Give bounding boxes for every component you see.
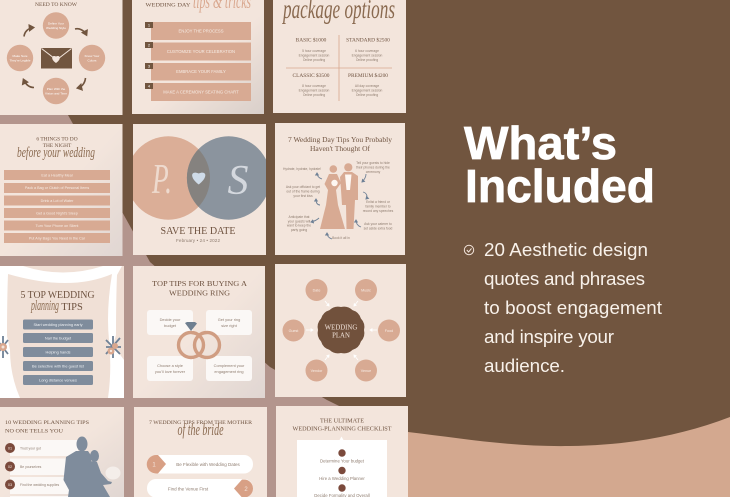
number tags — [147, 455, 253, 497]
tip rows — [10, 440, 78, 497]
package dividers — [286, 35, 392, 101]
heading: 6 things to do — [36, 136, 78, 149]
tip card labels: you'll love forever — [155, 369, 186, 374]
tip card labels: budget — [164, 323, 177, 328]
panel: top tips for buying a ring — [133, 266, 265, 398]
tip notes: ceremony — [366, 170, 381, 174]
badge numbers: 03 — [8, 483, 12, 487]
number tabs — [145, 22, 153, 89]
topic labels: Guest — [289, 329, 298, 333]
tip labels — [168, 462, 240, 492]
icon: check circle — [464, 245, 474, 255]
step labels: Determine Your budget — [320, 458, 365, 464]
panel: wedding day tips and tricks — [132, 0, 264, 114]
heading: need to know: NEED TO KNOW — [35, 2, 78, 8]
venn circles — [127, 136, 270, 220]
topic labels — [289, 288, 393, 373]
script word: planning: planning — [30, 298, 59, 314]
badge text: PLAN — [332, 332, 350, 340]
tip labels: Long distance venues — [39, 377, 77, 382]
tip numbers — [148, 22, 151, 88]
badge text: WEDDING — [325, 324, 357, 332]
heading: 10 planning tips — [5, 420, 89, 434]
heading: top tips — [152, 279, 247, 298]
package names: BASIC $1000 — [296, 36, 327, 44]
package details: Online proofing — [356, 93, 378, 97]
step labels: Plan With the — [47, 87, 65, 91]
package details — [299, 49, 383, 97]
tip notes: their phones during the — [356, 166, 390, 170]
list labels: Eat a Healthy Meal — [41, 173, 73, 177]
tag numbers: 2 — [244, 487, 248, 493]
heading: from the mother: 7 WEDDING TIPS FROM THE MOTHER — [149, 420, 252, 426]
topic labels: Venue — [361, 369, 371, 373]
heading: top tips: WEDDING RING — [169, 288, 230, 298]
heading: checklist: WEDDING-PLANNING CHECKLIST — [292, 426, 392, 432]
tip labels: Be selective with the guest list — [32, 363, 85, 368]
description text: 20 Aesthetic design — [484, 239, 648, 260]
panel: 10 planning tips — [0, 407, 124, 497]
package details: 6 hour coverage — [355, 49, 379, 53]
list labels: Put Any Bags You Need in the Car — [29, 236, 86, 240]
number badges — [5, 443, 15, 490]
tip labels: CUSTOMIZE YOUR CELEBRATION — [167, 49, 235, 54]
package details: 5 hour coverage — [302, 49, 326, 53]
tip card labels: Get your ring — [218, 317, 240, 322]
tag numbers: 1 — [152, 462, 156, 468]
package details: All day coverage — [355, 84, 379, 88]
step labels: They're Legible — [9, 58, 31, 62]
heading: wedding day: WEDDING DAY — [146, 2, 190, 8]
heading: tips: TIPS — [61, 302, 83, 313]
tip notes: your first kiss — [293, 194, 313, 198]
tip labels: Be Flexible with Wedding Dates — [176, 462, 240, 467]
step labels: Colors — [88, 58, 97, 62]
tip labels — [20, 446, 60, 487]
list labels: Turn Your Phone on Silent — [36, 224, 78, 228]
tip notes: Book it all in — [332, 236, 350, 240]
step labels: Define Your — [48, 22, 64, 26]
badge text — [325, 324, 357, 340]
tip notes: party going — [291, 228, 307, 232]
step labels: Wedding Style — [46, 26, 66, 30]
badge numbers: 02 — [8, 465, 12, 469]
heading: save the date: SAVE THE DATE — [160, 226, 236, 237]
icon: couple silhouette — [320, 163, 358, 229]
package names: CLASSIC $3500 — [292, 72, 330, 79]
checklist card — [297, 436, 387, 497]
panel: save the date — [127, 124, 270, 255]
tip labels: Find the Venue First — [168, 486, 209, 492]
cycle arrows — [24, 28, 86, 88]
list labels: Drink a Lot of Water — [41, 199, 74, 203]
package details: Engagement session — [352, 54, 383, 58]
heading: checklist — [292, 418, 392, 432]
tip notes: Ask your officiant to get — [286, 185, 320, 189]
step labels: Hire a Wedding Planner — [319, 476, 365, 481]
heading: 7 wedding day tips — [288, 137, 393, 153]
heading: 7 wedding day tips: 7 Wedding Day Tips You Probably — [288, 137, 393, 144]
heading: 10 planning tips: 10 WEDDING PLANNING TIPS — [5, 420, 89, 426]
tip notes — [283, 161, 394, 240]
heading: 5 top wedding: 5 TOP WEDDING — [20, 290, 95, 301]
tip notes: want to keep the — [287, 224, 311, 228]
initial S: S — [228, 158, 248, 204]
list bars — [4, 170, 110, 243]
background: mauve diagonal shape — [0, 115, 408, 497]
package details: 8 hour coverage — [302, 84, 326, 88]
tip card labels: size right — [221, 323, 238, 328]
package details: Online proofing — [356, 58, 378, 62]
package names — [292, 36, 390, 79]
panel: need to know cycle — [0, 0, 122, 115]
heading: top tips: TOP TIPS FOR BUYING A — [152, 279, 247, 288]
tip card labels — [155, 317, 245, 374]
connector arrows — [306, 301, 377, 360]
heading: 6 things to do: 6 THINGS TO DO — [36, 136, 78, 142]
icon: diamond rings — [178, 322, 220, 358]
panel: wedding plan — [275, 264, 406, 397]
step labels — [9, 22, 99, 96]
description text: to boost engagement — [484, 297, 663, 318]
badge numbers — [8, 446, 12, 487]
tip labels — [32, 322, 85, 382]
description text — [484, 239, 663, 376]
tip card labels: engagement ring — [214, 369, 244, 374]
tip numbers: 4 — [148, 84, 151, 88]
heading: 7 wedding day tips: Haven't Thought Of — [310, 146, 371, 153]
package details: Engagement session — [352, 88, 383, 92]
tip notes: Hydrate, hydrate, hydrate! — [283, 167, 321, 171]
script heading: before your wedding: before your wedding — [17, 145, 95, 161]
panel: package options — [273, 0, 406, 113]
tip notes: record any speeches — [363, 209, 394, 213]
package details: Engagement session — [299, 88, 330, 92]
topic labels: Date — [313, 288, 320, 292]
tip numbers: 3 — [148, 64, 151, 68]
tip labels — [163, 28, 239, 94]
tag numbers — [152, 462, 248, 493]
tip numbers: 1 — [148, 22, 151, 28]
description text: audience. — [484, 355, 565, 376]
topic labels: Vendor — [311, 369, 323, 373]
background: tan wave — [408, 417, 730, 497]
title: what's included — [464, 117, 655, 212]
tip cards — [147, 310, 252, 381]
central scalloped badge — [318, 307, 364, 353]
tip notes: Ask your caterer to — [364, 222, 392, 226]
icon: right flower — [106, 336, 121, 358]
heading: 6 things to do: THE NIGHT — [43, 143, 72, 149]
panel: wedding planning checklist — [276, 406, 408, 497]
description text: and inspire your — [484, 326, 614, 347]
tip notes: Tell your guests to hide — [356, 161, 390, 165]
step labels — [314, 458, 370, 497]
icon: heart — [192, 173, 205, 184]
date: February • 24 • 2022 — [176, 238, 220, 243]
list labels: Get a Good Night's Sleep — [36, 211, 78, 215]
script heading: of the bride: of the bride — [178, 420, 224, 439]
tip labels: Trust your gut — [20, 446, 41, 450]
badge numbers: 01 — [8, 446, 12, 450]
tip notes: family member to — [365, 204, 391, 208]
icon: envelope with heart — [41, 48, 72, 68]
tip labels: EMBRACE YOUR FAMILY — [176, 69, 226, 74]
package details: Engagement session — [299, 54, 330, 58]
tip bars — [151, 22, 251, 101]
topic labels: Music — [361, 288, 371, 292]
panel: 6 things to do — [0, 124, 122, 256]
tip notes: Anticipate that — [289, 215, 310, 219]
topic circles — [282, 279, 400, 382]
tip labels: Start wedding planning early — [33, 322, 83, 327]
tip labels: ENJOY THE PROCESS — [178, 28, 224, 34]
tip numbers: 2 — [148, 42, 151, 48]
package details: Online proofing — [303, 58, 325, 62]
tip notes: out of the frame during — [286, 190, 320, 194]
tip labels: MAKE A CEREMONY SEATING CHART — [163, 90, 239, 94]
step circles — [7, 12, 105, 104]
panel: 5 top wedding planning tips — [0, 266, 124, 398]
panel: tips from the mother of the bride — [134, 407, 267, 497]
tip notes: Enlist a friend or — [366, 200, 391, 204]
heading: checklist: THE ULTIMATE — [320, 418, 364, 424]
package details: Online proofing — [303, 93, 325, 97]
tip labels: Nail the budget — [45, 335, 72, 340]
tip notes: your guests will — [288, 219, 311, 223]
package names: STANDARD $2500 — [346, 36, 390, 44]
tip labels: Find the wedding supplies — [20, 483, 60, 487]
tip bars — [23, 320, 93, 385]
tip card labels: Choose a style — [157, 363, 183, 368]
note arrows — [311, 173, 367, 239]
panel: 7 wedding day tips — [275, 123, 405, 255]
tip labels: Helping hands — [46, 349, 70, 354]
step labels: Make Sure — [13, 54, 28, 58]
tip pills — [147, 455, 253, 497]
tip notes: set aside extra food — [364, 226, 393, 230]
tip labels: Be yourselves — [20, 465, 42, 469]
topic labels: Food — [385, 329, 393, 333]
tip card labels: Decide your — [160, 317, 181, 322]
tip card labels: Complement your — [214, 363, 245, 368]
step badges — [338, 449, 346, 492]
initial P: P. — [151, 157, 172, 203]
title: what's included: Included — [465, 160, 655, 212]
heading: 10 planning tips: NO ONE TELLS YOU — [5, 428, 63, 434]
package names: PREMIUM $4200 — [348, 72, 388, 79]
title: what's included: What’s — [464, 117, 617, 169]
description text: quotes and phrases — [484, 268, 645, 289]
icon: couple silhouette — [64, 436, 120, 497]
step labels: Vision and Time — [45, 92, 67, 96]
list labels — [25, 173, 89, 240]
step labels: Know Your — [85, 54, 99, 58]
list labels: Pack a Bag or Clutch of Personal Items — [25, 186, 89, 190]
white curtains — [0, 266, 124, 398]
icon: left flower — [0, 336, 8, 358]
